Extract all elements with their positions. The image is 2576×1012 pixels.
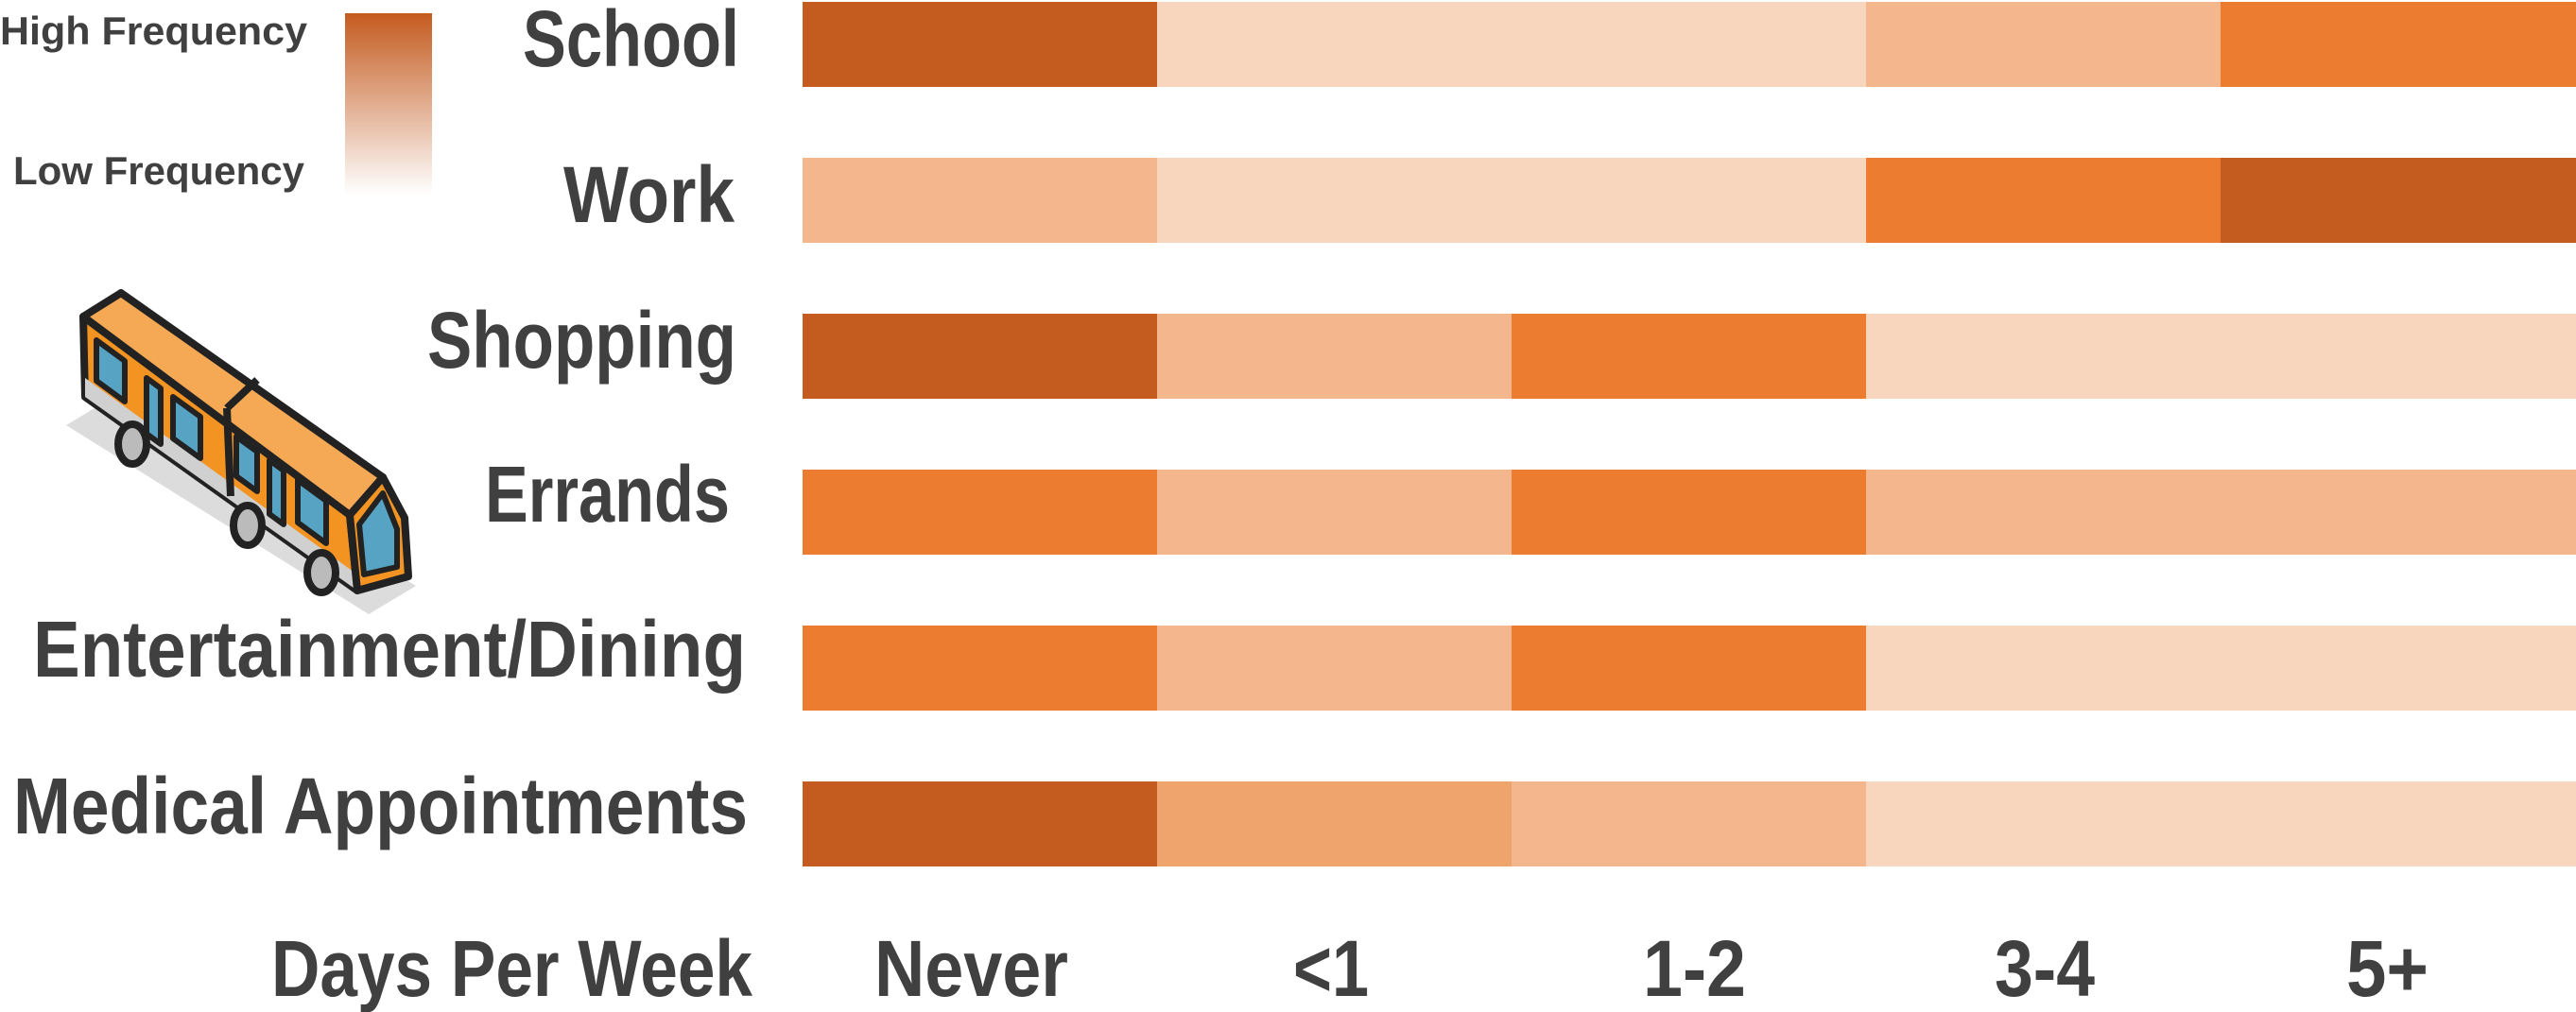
row: Shopping: [803, 314, 2576, 399]
icon: bus: [66, 293, 416, 614]
label: Errands: Errands: [485, 450, 730, 539]
tick: 3-4: 3-4: [1995, 924, 2095, 1012]
label: Work: Work: [563, 150, 735, 239]
axis title: Days Per Week: [271, 924, 752, 1012]
row: Entertainment/Dining: [803, 626, 2576, 711]
label: Entertainment/Dining: Entertainment/Dining: [33, 605, 746, 694]
row: Medical Appointments: [803, 781, 2576, 866]
row labels: [13, 0, 748, 850]
label: Shopping: Shopping: [427, 296, 736, 385]
x axis labels: [271, 924, 2429, 1012]
tick: 5+: 5+: [2346, 924, 2429, 1012]
heatmap: [803, 2, 2576, 866]
legend gradient: [345, 13, 432, 195]
legend label low: Low Frequency: [13, 148, 305, 193]
row: Errands: [803, 470, 2576, 555]
legend label high: High Frequency: [0, 9, 308, 53]
label: Medical Appointments: Medical Appointments: [13, 762, 748, 850]
row: School: [803, 2, 2576, 87]
tick: <1: <1: [1293, 924, 1369, 1012]
row: Work: [803, 158, 2576, 243]
tick: Never: Never: [874, 924, 1068, 1012]
tick: 1-2: 1-2: [1643, 924, 1746, 1012]
legend: [0, 9, 432, 195]
